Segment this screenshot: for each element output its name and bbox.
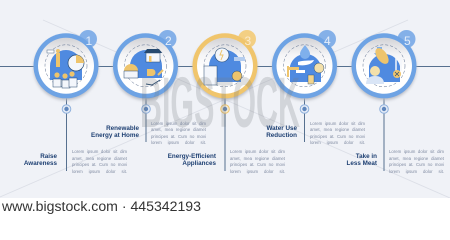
timeline xyxy=(0,66,450,68)
circle 4: 4 xyxy=(324,34,331,48)
icon: energy appliances xyxy=(204,48,245,85)
text block 5: Lorem ipsum dolor sit dim amet, mea regione diamet principes at. Cum no movi lorem ipsum dolor sit. xyxy=(389,149,444,174)
heading: Renewable Energy at Home: Energy at Home xyxy=(91,132,139,139)
icon: raising awareness xyxy=(47,49,84,88)
circle 1 xyxy=(34,30,98,100)
text block 2: Lorem ipsum dolor sit dim amet, mea regione diamet principes at. Cum no movi lorem ipsum dolor sit. xyxy=(151,120,206,145)
heading: Water Use Reduction: Water Use xyxy=(266,124,297,132)
circle 3: 3 xyxy=(244,34,252,48)
circle 5 xyxy=(352,30,416,100)
footer credit: www.bigstock.com · 445342193 xyxy=(2,198,201,214)
icon: water drop xyxy=(287,45,324,84)
step 1 marker xyxy=(62,98,71,171)
circle 2 xyxy=(113,30,178,100)
heading: Raise Awareness xyxy=(24,153,57,167)
step 4 marker xyxy=(300,98,309,142)
circle 2: 2 xyxy=(165,34,172,48)
heading: Raise Awareness: Raise xyxy=(40,153,57,160)
heading: Energy-Efficient Appliances xyxy=(168,153,216,167)
step 2 marker xyxy=(142,98,150,142)
circle 4 xyxy=(272,30,337,100)
step 3 marker xyxy=(221,98,229,171)
text block 4: Lorem ipsum dolor sit dim amet, mea regione diamet principes at. Cum no movi lorem ipsum dolor sit. xyxy=(310,120,365,145)
heading: Raise Awareness: Awareness xyxy=(24,160,57,167)
heading: Take in Less Meat: Less Meat xyxy=(347,160,377,167)
heading: Take in Less Meat xyxy=(346,153,377,167)
step 5 marker xyxy=(380,98,388,171)
circle 3 xyxy=(192,30,258,100)
icon: solar and home xyxy=(124,49,163,85)
icon: food and meat xyxy=(366,46,401,84)
heading: Water Use Reduction: Reduction xyxy=(266,132,297,139)
heading: Renewable Energy at Home xyxy=(91,124,139,139)
heading: Renewable Energy at Home: Renewable xyxy=(106,124,139,132)
heading: Take in Less Meat: Take in xyxy=(356,153,377,160)
text block 1: Lorem ipsum dolor sit dim amet, mea regione diamet principes at. Cum no movi lorem ipsum dolor sit. xyxy=(72,149,127,174)
circle 5: 5 xyxy=(404,34,411,48)
heading: Energy-Efficient Appliances: Appliances xyxy=(182,160,216,167)
heading: Energy-Efficient Appliances: Energy-Efficient xyxy=(168,153,216,160)
heading: Water Use Reduction xyxy=(266,124,297,139)
text block 3: Lorem ipsum dolor sit dim amet, mea regione diamet principes at. Cum no movi lorem ipsum dolor sit. xyxy=(230,149,285,174)
circle 1: 1 xyxy=(86,34,92,48)
